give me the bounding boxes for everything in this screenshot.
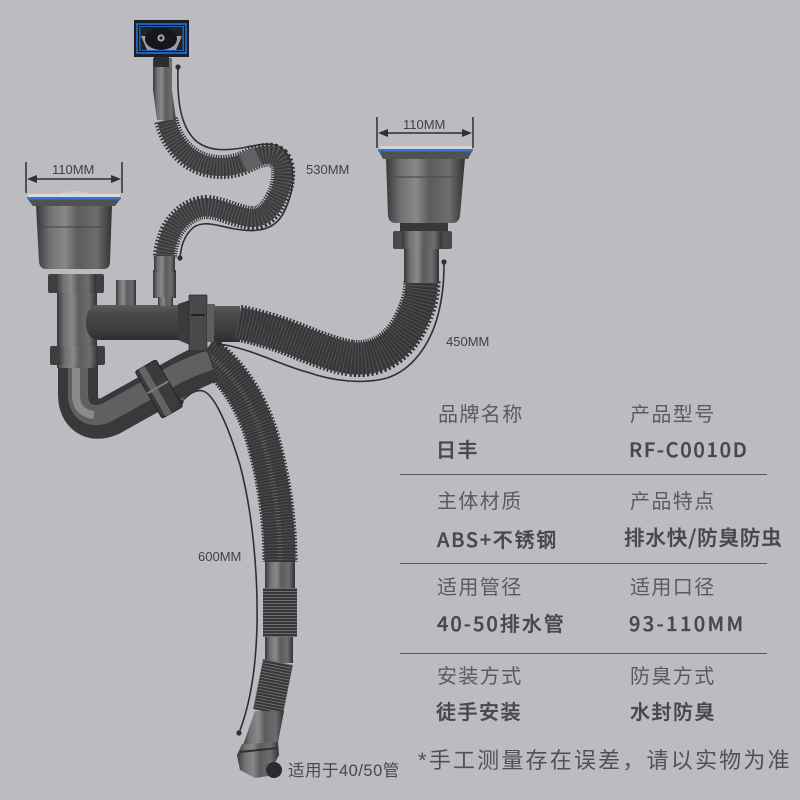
left flange — [27, 191, 121, 206]
right nut — [393, 223, 452, 249]
trap nut — [135, 360, 183, 418]
left sink basket — [27, 191, 121, 368]
hose socket — [153, 270, 176, 306]
product diagram: drain kit — [27, 20, 473, 778]
dimension: 600MM — [178, 390, 257, 736]
dimension: right 110MM — [377, 117, 473, 148]
right neck — [404, 245, 439, 283]
row: brand and model — [436, 403, 748, 463]
right sink basket — [378, 146, 473, 283]
right cup — [386, 158, 465, 223]
row: install and odor: 水封防臭 — [630, 696, 716, 725]
left pipe — [57, 290, 97, 368]
row: install and odor — [436, 665, 716, 725]
overflow box — [134, 20, 189, 67]
row: pipe and opening — [437, 576, 746, 637]
dimension: right 110MM: 110MM — [403, 117, 445, 132]
horizontal tee — [86, 270, 240, 351]
row: material and features: 产品特点 — [630, 490, 716, 513]
row: pipe and opening: 93-110MM — [629, 608, 746, 637]
right flange — [378, 146, 473, 159]
long drain hose 600mm — [205, 352, 297, 748]
dimension: 530MM: 530MM — [306, 162, 349, 177]
row: material and features: 排水快/防臭防虫 — [624, 521, 783, 551]
tee body — [86, 305, 180, 340]
row: brand and model: 日丰 — [436, 434, 479, 463]
dimension: left 110MM — [26, 162, 122, 193]
row: brand and model: 产品型号 — [630, 403, 716, 426]
dimension: 450MM — [216, 259, 489, 381]
end cap — [237, 742, 279, 778]
dimension: 530MM — [175, 64, 349, 261]
spec table — [400, 403, 783, 725]
footnote: *手工测量存在误差，请以实物为准 — [418, 748, 792, 773]
dimension: 450MM: 450MM — [446, 334, 489, 349]
row: pipe and opening: 40-50排水管 — [437, 608, 566, 637]
dimension: 600MM: 600MM — [198, 549, 241, 564]
row: install and odor: 徒手安装 — [436, 696, 522, 725]
upper hose 530mm — [153, 58, 283, 272]
row: brand and model: RF-C0010D — [629, 434, 748, 463]
row: pipe and opening: 适用口径 — [630, 576, 716, 599]
row: material and features: 主体材质 — [437, 490, 523, 513]
row: install and odor: 防臭方式 — [630, 665, 716, 688]
right hose 450mm — [238, 280, 422, 359]
left upper nut — [48, 274, 104, 293]
left lower nut — [50, 346, 105, 365]
dimension: left 110MM: 110MM — [52, 162, 94, 177]
callout: fits 40/50 pipe: 适用于40/50管 — [288, 761, 400, 780]
tee nut — [178, 295, 215, 351]
row: install and odor: 安装方式 — [437, 665, 523, 688]
row: material and features: ABS+不锈钢 — [437, 524, 558, 553]
left cup — [36, 205, 112, 269]
row: brand and model: 品牌名称 — [438, 403, 524, 426]
row: pipe and opening: 适用管径 — [437, 576, 523, 599]
P-trap — [76, 360, 212, 419]
row: material and features — [437, 490, 783, 553]
tee stub — [116, 280, 136, 308]
